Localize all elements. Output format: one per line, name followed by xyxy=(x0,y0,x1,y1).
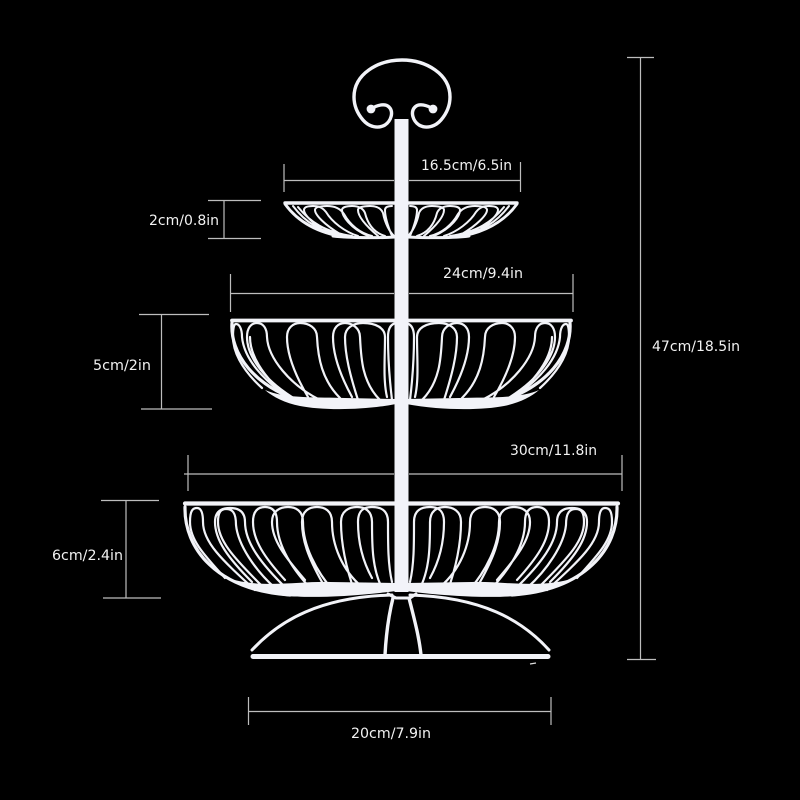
dimension: top tier width: 16.5cm/6.5in xyxy=(421,158,512,174)
dimension: total height: 47cm/18.5in xyxy=(652,339,740,355)
handle ball ends xyxy=(367,105,437,113)
base frame xyxy=(252,594,549,664)
dimension: top tier height xyxy=(149,200,261,238)
middle basket xyxy=(232,320,571,409)
dimension: middle tier width xyxy=(230,266,573,312)
dimension: bottom tier width: 30cm/11.8in xyxy=(510,443,597,459)
middle basket lower band xyxy=(265,390,539,409)
dimension: middle tier height: 5cm/2in xyxy=(93,358,151,374)
dimension: bottom tier width xyxy=(184,443,622,491)
dimension: middle tier height xyxy=(93,314,212,409)
dimension: bottom tier height: 6cm/2.4in xyxy=(52,548,123,564)
central pole xyxy=(394,119,408,592)
dimension: top tier height: 2cm/0.8in xyxy=(149,213,219,229)
product: three tier wire stand xyxy=(185,60,618,664)
dimension: total height xyxy=(627,58,740,660)
dimension: bottom tier height xyxy=(52,500,161,598)
dimension: middle tier width: 24cm/9.4in xyxy=(443,266,523,282)
handle xyxy=(354,60,450,127)
bottom basket lower band xyxy=(228,578,574,597)
dimension: base width xyxy=(248,697,551,742)
top basket xyxy=(285,203,517,238)
dimension: base width: 20cm/7.9in xyxy=(351,726,431,742)
bottom basket xyxy=(185,504,618,597)
dimension: top tier width xyxy=(284,158,520,192)
